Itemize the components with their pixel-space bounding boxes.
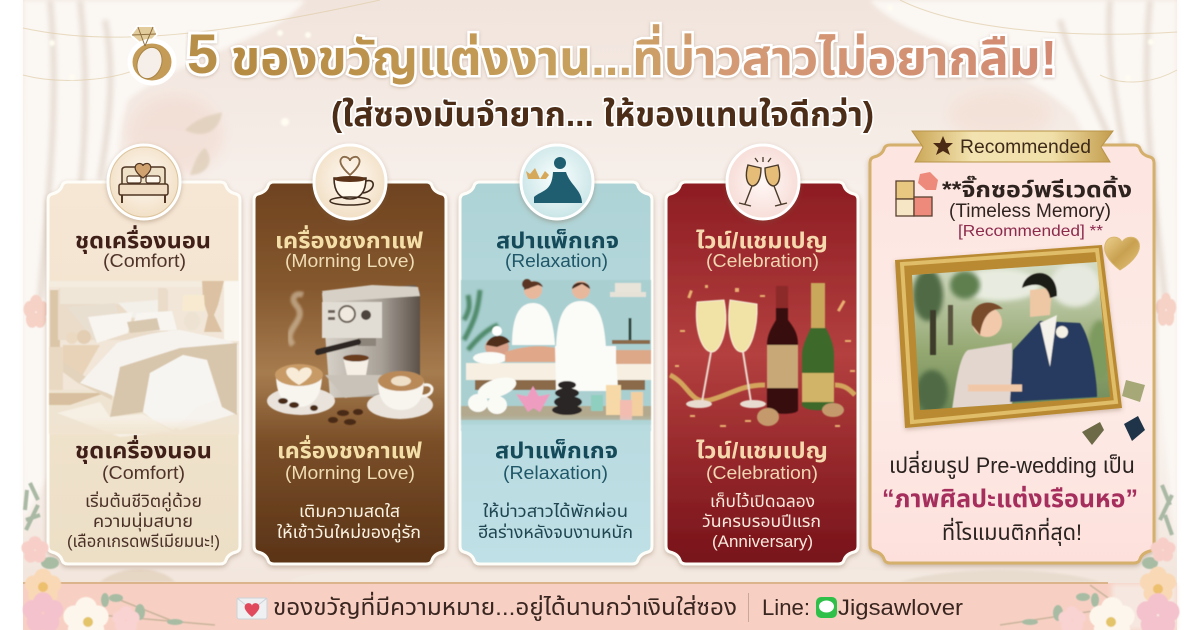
description: เก็บไว้เปิดฉลอง <box>710 493 815 511</box>
footer florals <box>21 536 1179 630</box>
panel: spa package <box>460 145 652 564</box>
heading repeat: สปาแพ็กเกจ <box>495 438 618 463</box>
icon: diamond ring <box>130 27 174 83</box>
icon: coffee badge <box>314 145 386 219</box>
icon: line app <box>816 597 837 618</box>
icon: loose puzzle pieces <box>1082 380 1145 445</box>
description: เริ่มต้นชีวิตคู่ด้วย <box>85 491 202 511</box>
line handle: Jigsawlover <box>838 595 963 620</box>
description <box>702 493 821 551</box>
subheading repeat: (Comfort) <box>102 463 185 483</box>
tag: [Recommended] ** <box>958 223 1103 240</box>
heading: ชุดเครื่องนอน <box>75 225 211 254</box>
description: ความนุ่มสบาย <box>93 513 193 531</box>
panel: bedding <box>48 145 240 564</box>
icon: spa badge <box>521 145 593 219</box>
subheading: (Morning Love) <box>285 251 415 271</box>
panel: coffee machine <box>254 145 446 564</box>
icon: bed badge <box>108 145 180 219</box>
subheading: (Celebration) <box>706 251 819 271</box>
recommended ribbon <box>912 131 1113 162</box>
illustration: wine <box>670 283 855 427</box>
heading: เครื่องชงกาแฟ <box>275 225 423 253</box>
description <box>478 503 633 542</box>
subheading repeat: (Morning Love) <box>285 463 415 483</box>
heading repeat: ไวน์/แชมเปญ <box>696 438 828 463</box>
body line 3: ที่โรแมนติกที่สุด! <box>942 517 1082 546</box>
panel: pre-wedding jigsaw <box>870 131 1154 563</box>
footer message: ของขวัญที่มีความหมาย...อยู่ได้นานกว่าเงินใส่ซอง <box>273 591 737 622</box>
body highlight: “ภาพศิลปะแต่งเรือนหอ” <box>882 485 1138 513</box>
description: ฮีลร่างหลังจบงานหนัก <box>478 524 633 542</box>
panel: wine and champagne <box>666 145 858 564</box>
description: (Anniversary) <box>712 533 813 551</box>
subheading repeat: (Celebration) <box>706 463 818 483</box>
icon: puzzle <box>896 172 938 216</box>
title number: 5 <box>187 22 218 85</box>
heading: ไวน์/แชมเปญ <box>696 228 828 253</box>
icon: love letter <box>237 598 267 619</box>
subheading: (Relaxation) <box>505 251 608 271</box>
description: วันครบรอบปีแรก <box>702 513 821 531</box>
heading: **จิ๊กซอว์พรีเวดดิ้ง <box>942 175 1132 202</box>
heading repeat: ชุดเครื่องนอน <box>75 435 212 464</box>
description: เติมความสดใส <box>299 503 400 521</box>
illustration: bed <box>49 281 239 437</box>
body line 1: เปลี่ยนรูป Pre-wedding เป็น <box>889 450 1135 479</box>
description: ให้บ่าวสาวได้พักผ่อน <box>483 503 628 521</box>
illustration: coffee <box>267 285 433 425</box>
subheading: (Comfort) <box>103 251 186 271</box>
side florals <box>24 293 1176 535</box>
icon: gold heart <box>1105 237 1139 270</box>
subheading: (Timeless Memory) <box>949 201 1111 222</box>
illustration: spa <box>461 279 651 431</box>
description <box>277 503 421 542</box>
line label: Line: <box>762 595 810 620</box>
title text: ของขวัญแต่งงาน...ที่บ่าวสาวไม่อยากลืม! <box>231 24 1057 86</box>
subtitle: (ใส่ซองมันจำยาก... ให้ของแทนใจดีกว่า) <box>331 96 874 134</box>
heading: สปาแพ็กเกจ <box>496 228 619 253</box>
icon: champagne badge <box>727 145 799 219</box>
description: (เลือกเกรดพรีเมียมนะ!) <box>67 533 220 551</box>
description: ให้เช้าวันใหม่ของคู่รัก <box>277 524 421 542</box>
title <box>130 22 1057 134</box>
subheading repeat: (Relaxation) <box>503 463 608 483</box>
heading repeat: เครื่องชงกาแฟ <box>277 435 422 463</box>
ribbon label: Recommended <box>960 137 1091 158</box>
description <box>67 491 220 551</box>
icon: star <box>933 136 953 155</box>
footer bar <box>21 536 1179 630</box>
framed photo <box>895 245 1122 428</box>
